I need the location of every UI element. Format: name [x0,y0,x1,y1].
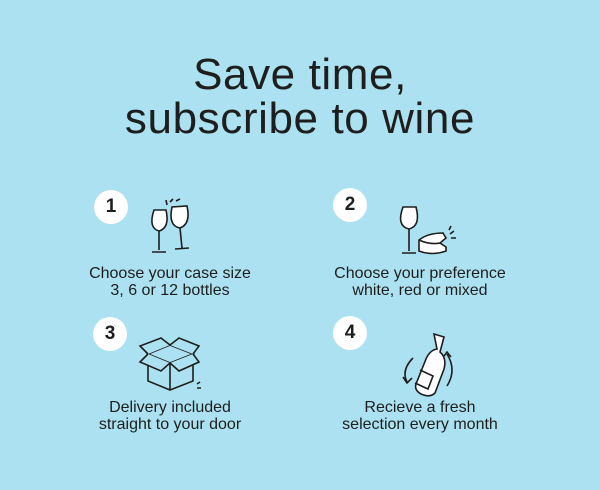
step 2 number [333,188,367,222]
icon: rotating wine bottle [403,334,452,396]
step 1 text [89,265,251,299]
step 1 number: 1 [106,196,116,217]
step 3 number [93,317,127,351]
title [125,50,475,143]
step 2 text: Choose your preference [334,265,506,282]
step 1 text: Choose your case size [89,265,251,282]
step 3 text: Delivery included [109,399,231,416]
step 3 text [99,399,241,433]
step 2 number: 2 [345,194,355,215]
step 2 text: white, red or mixed [352,282,488,299]
title: Save time, [193,50,407,99]
title: subscribe to wine [125,94,475,143]
step 4 number: 4 [345,322,355,343]
step 1 number [94,190,128,224]
step 1 text: 3, 6 or 12 bottles [110,282,230,299]
step 4 number [333,316,367,350]
icon: wine glass and cheese [401,207,456,254]
step 3 text: straight to your door [99,416,241,433]
step 4 text [342,399,498,433]
step 4 text: selection every month [342,416,498,433]
icon: open box [140,338,201,390]
step 2 text [334,265,506,299]
step 4 text: Recieve a fresh [364,399,476,416]
step 3 number: 3 [105,323,115,344]
icon: two wine glasses [152,199,189,252]
